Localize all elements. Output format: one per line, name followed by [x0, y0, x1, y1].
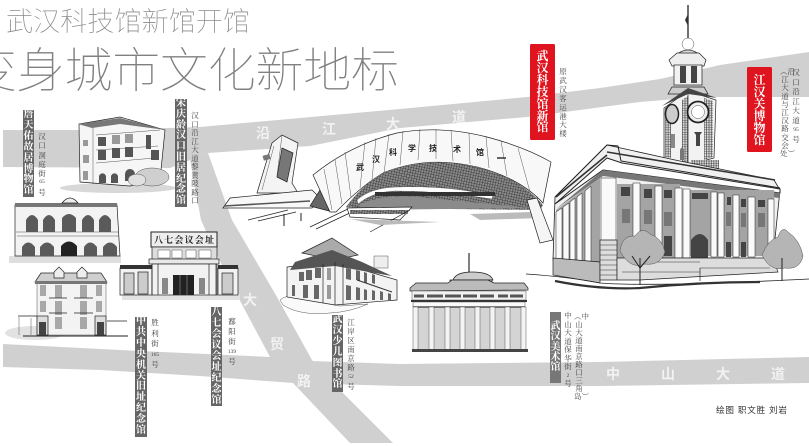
road: Zhongshan Avenue	[3, 344, 809, 386]
building: CPC central committee former site	[5, 267, 128, 340]
building: August 7 meeting site: 八七会议会址	[154, 233, 214, 246]
curved roof shell: 馆	[476, 147, 484, 157]
label: Soong Ching-ling residence: 宋庆龄汉口旧居纪念馆	[176, 98, 186, 206]
building: Zhan Tianyou residence	[60, 117, 176, 193]
curved roof shell: 技	[429, 143, 437, 153]
credit: 绘图 职文胜 刘岩	[716, 404, 787, 415]
road name: 中山大道	[606, 366, 785, 382]
label: children's library: 江岸区南京路 号	[347, 318, 355, 391]
building: Jianghan Customs Museum	[526, 5, 809, 288]
curved roof shell	[313, 129, 551, 212]
label: Jianghan Customs museum: ︵沿江大道与江汉路交会处︶	[780, 67, 795, 158]
label: August 7 memorial: 八七会议会址纪念馆	[212, 307, 222, 406]
road name: 沿江大道: 沿	[256, 125, 270, 141]
label: art museum: 2	[567, 372, 569, 378]
road name: 大智路: 大	[243, 292, 257, 308]
arch hatching and glazed hall	[346, 162, 553, 243]
road name: 沿江大道: 道	[452, 109, 466, 125]
clock tower	[662, 5, 719, 172]
building: Fuxing heritage villa	[9, 198, 121, 263]
label: Zhan Tianyou museum: 詹天佑故居博物馆	[24, 109, 34, 196]
curved roof shell: 科	[389, 147, 397, 157]
label: science museum new hall: 武汉科技馆新馆	[536, 49, 548, 134]
main block	[553, 145, 780, 268]
building: Wuhan Science and Technology Museum new hall	[223, 129, 553, 243]
tree left	[620, 230, 665, 285]
label: art museum: 武汉美术馆	[550, 321, 560, 373]
label: Zhan Tianyou museum: 汉口洞庭街 号	[38, 132, 46, 197]
building: Wuhan Art Museum	[410, 253, 528, 352]
label: science museum new hall	[530, 44, 567, 140]
label: Zhan Tianyou museum: 65	[39, 179, 45, 185]
road name: 大智路: 贸	[270, 336, 284, 352]
label: children's library: 52	[348, 374, 354, 380]
label: Zhan Tianyou museum	[23, 109, 46, 197]
road name: 沿江大道: 江	[322, 121, 336, 137]
label: Jianghan Customs museum: 江汉关博物馆	[753, 73, 766, 147]
label: Soong Ching-ling residence: 汉口沿江大道黎黄陂路口	[191, 111, 199, 205]
road name: 沿江大道	[256, 109, 466, 141]
label: science museum new hall: 原武汉客运港大楼	[559, 67, 567, 138]
curved roof shell: 术	[453, 144, 461, 154]
label: children's library: 武汉少儿图书馆	[332, 314, 342, 390]
steps and base	[526, 240, 809, 288]
curved roof shell: 学	[408, 143, 416, 153]
road name: 中山大道: 山	[661, 366, 675, 382]
window details	[621, 187, 765, 258]
building: August 7 meeting site	[120, 232, 240, 300]
curved roof shell: 武	[356, 163, 364, 172]
label: CPC central committee memorial: 中共中央机关旧址纪念馆	[136, 316, 146, 436]
left entrance tower	[223, 135, 356, 229]
label: August 7 memorial: 139	[228, 349, 236, 355]
road name: 大智路	[243, 292, 311, 389]
road name: 中山大道: 中	[606, 366, 620, 382]
road name: 中山大道: 道	[771, 366, 785, 382]
label: Soong Ching-ling residence	[175, 98, 199, 207]
label: CPC central committee memorial	[135, 316, 159, 437]
facade windows	[556, 178, 774, 265]
label: art museum: ︵中山大道南京路口三角岛︶	[574, 312, 589, 401]
columns	[556, 178, 774, 263]
tree right	[762, 229, 803, 281]
road: Yanjiang Avenue	[3, 52, 809, 168]
label: Jianghan Customs museum	[747, 67, 800, 158]
road name: 中山大道: 大	[716, 366, 730, 382]
curved roof shell: 汉	[372, 155, 380, 164]
road name: 大智路: 路	[297, 373, 311, 389]
label: children's library	[332, 314, 355, 392]
label: CPC central committee memorial: 165	[151, 352, 159, 358]
road name: 沿江大道: 大	[386, 116, 400, 132]
road: Dazhi Road	[190, 153, 393, 443]
subtitle: 武汉科技馆新馆开馆	[6, 0, 250, 39]
label: CPC central committee memorial: 胜利街 号	[151, 318, 159, 369]
label: art museum: 中山大道保华街 号	[564, 311, 572, 388]
label: August 7 memorial	[211, 307, 236, 406]
label: art museum	[550, 311, 589, 401]
label: Jianghan Customs museum: 汉口沿江大道 号	[792, 68, 800, 144]
label: Jianghan Customs museum: 95	[793, 127, 799, 133]
building: Wuhan Children's Library	[280, 238, 397, 314]
label: August 7 memorial: 鄱阳街 号	[228, 317, 236, 366]
